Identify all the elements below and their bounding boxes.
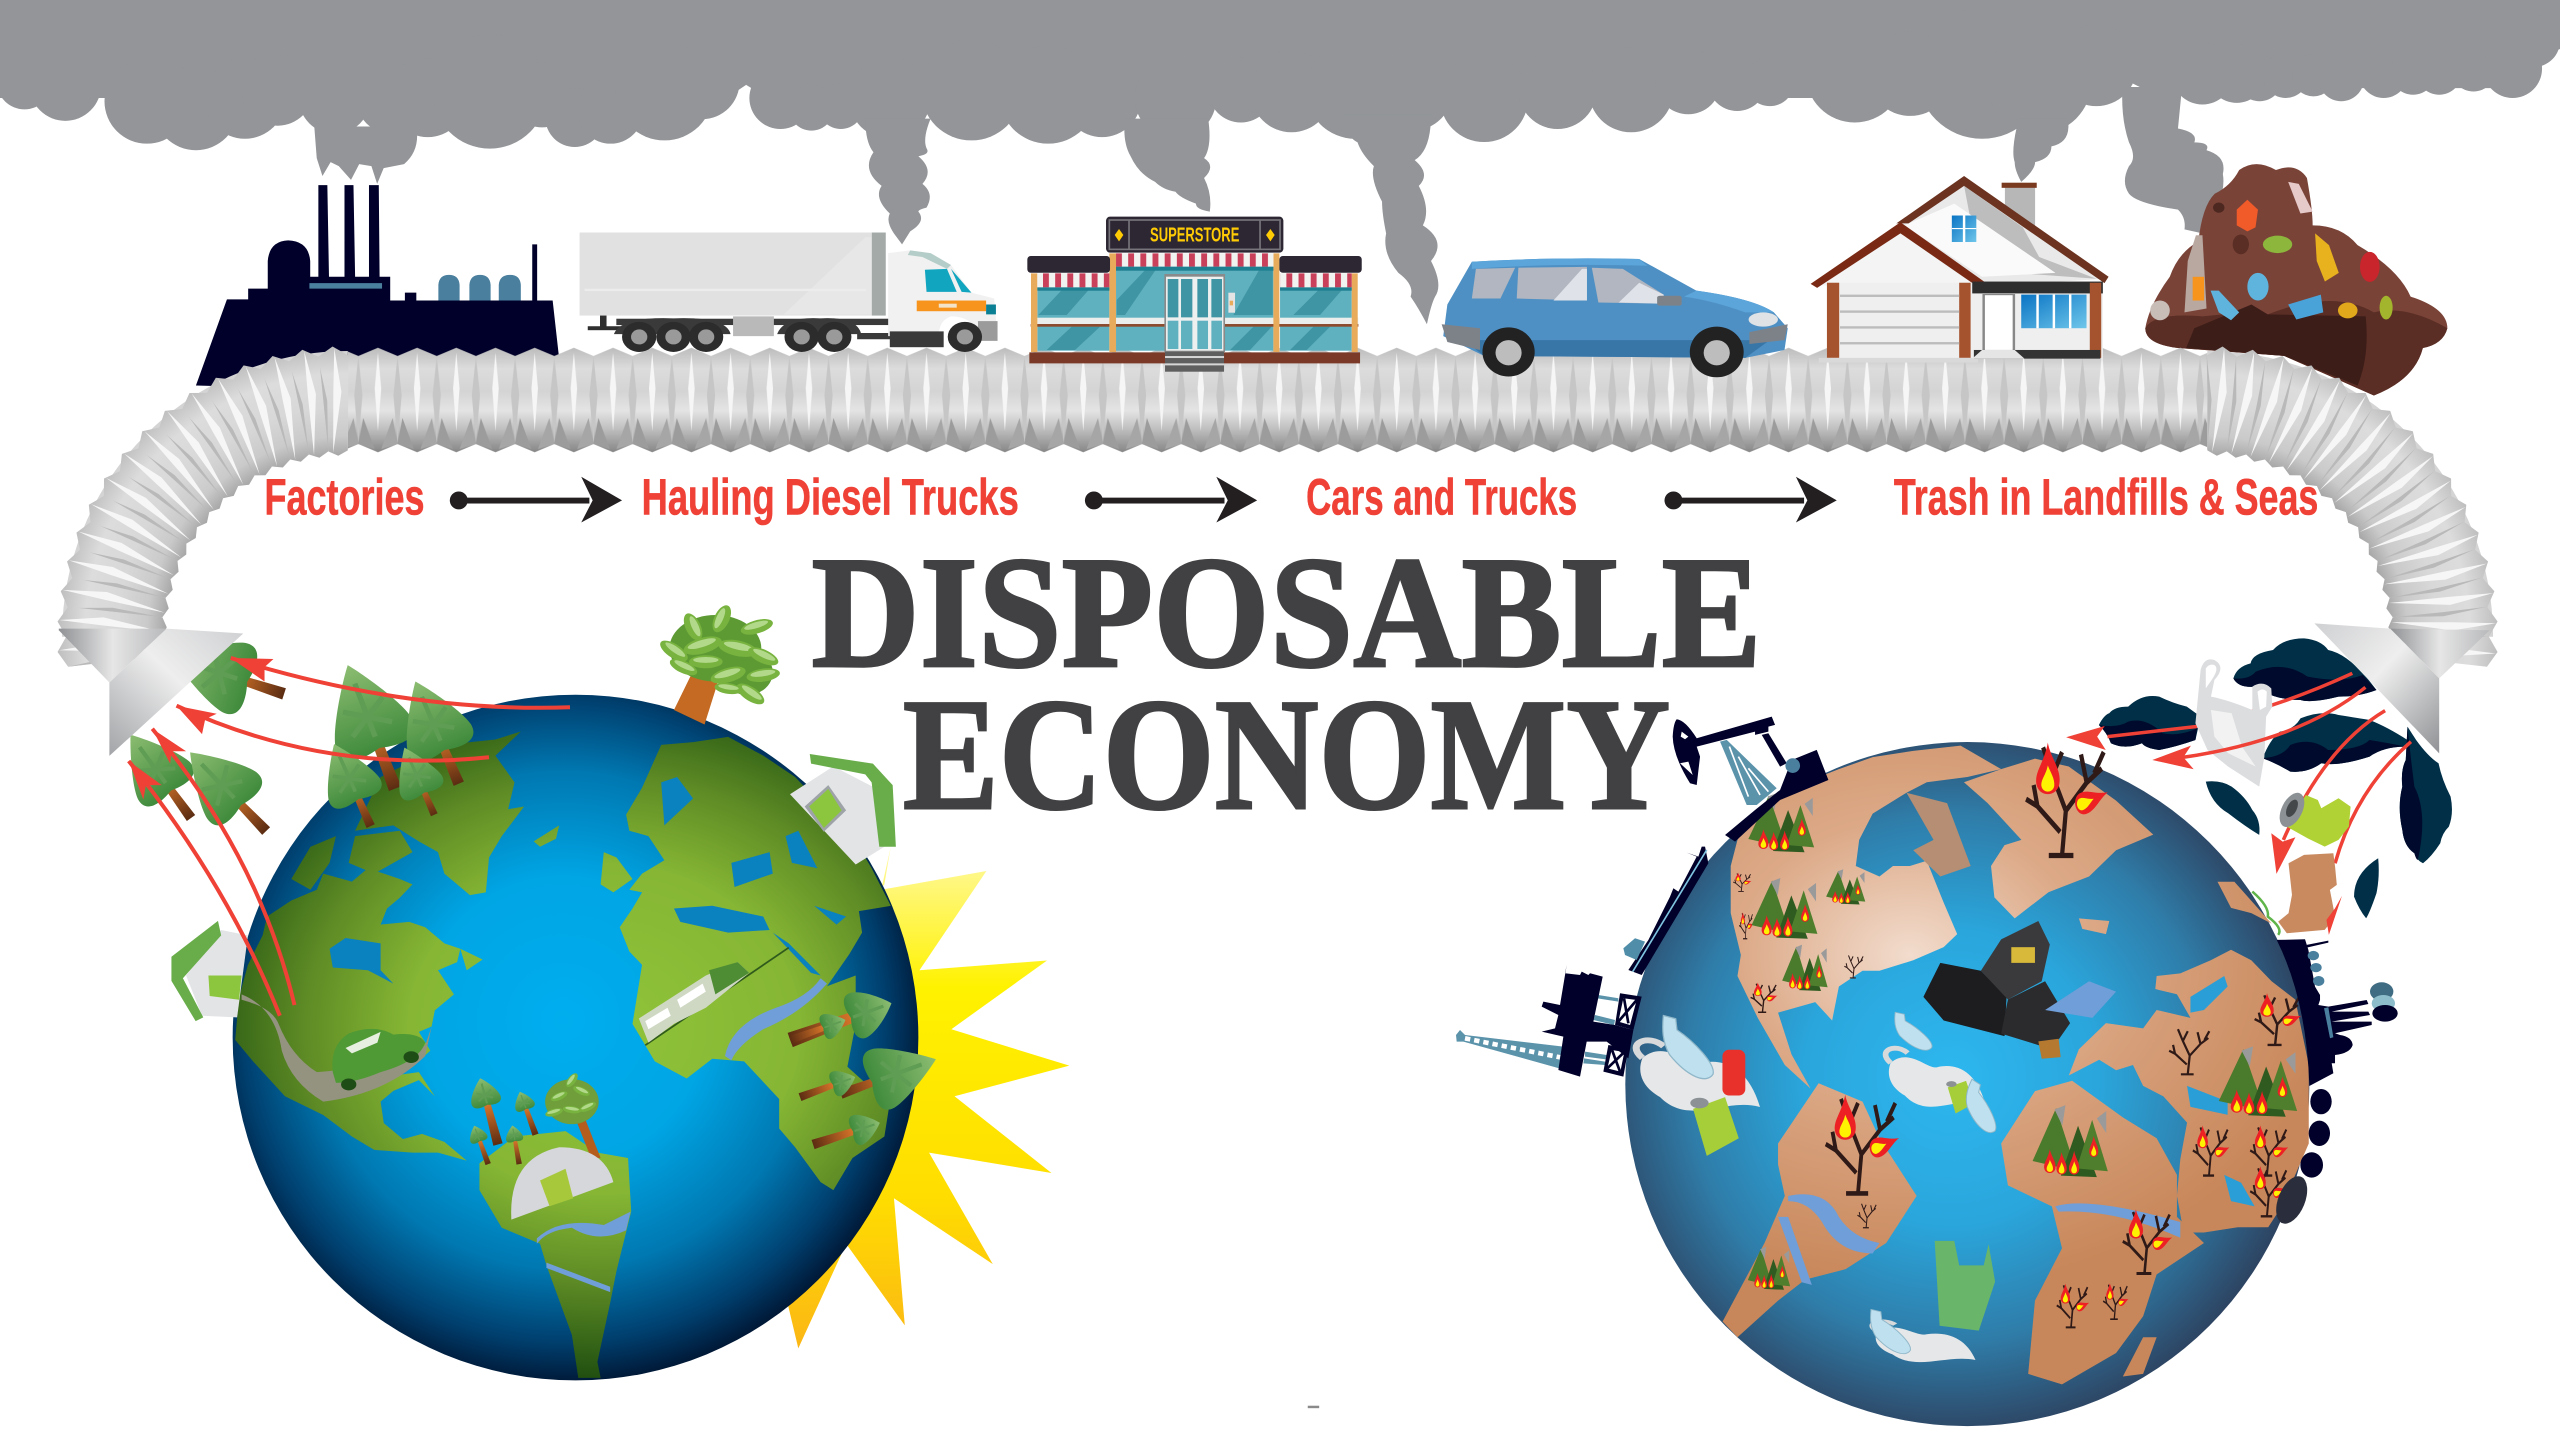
smoke plume: house bbox=[2013, 119, 2068, 182]
sun bbox=[738, 847, 1069, 1348]
house on globe: left bbox=[171, 921, 248, 1021]
flow arrows: right lower bbox=[2152, 687, 2411, 874]
left globe: healthy earth bbox=[105, 603, 947, 1380]
smoke plume: car bbox=[1345, 115, 1438, 324]
leafy tree: south america bbox=[544, 1072, 601, 1158]
store sign: SUPERSTORE bbox=[1150, 225, 1239, 247]
smoke plume: factory bbox=[314, 127, 417, 184]
fire trees bbox=[1733, 743, 2303, 1327]
right globe: polluted earth bbox=[1456, 687, 2411, 1426]
ocean trash: north atlantic bbox=[1886, 1012, 2009, 1134]
smoke plume: trash pile bbox=[2122, 87, 2224, 233]
arrow: cars to trash bbox=[1664, 477, 1837, 522]
leafy tree: top of globe bbox=[656, 603, 782, 724]
pipe bend: right bbox=[2202, 346, 2498, 667]
truck wheels bbox=[622, 322, 982, 352]
superstore bbox=[1027, 217, 1362, 372]
title line 1: DISPOSABLE bbox=[811, 523, 1762, 701]
flying trash: cardboard bbox=[2278, 853, 2342, 935]
trash pile bbox=[2145, 164, 2447, 395]
oil pump bbox=[1673, 717, 1828, 842]
cloud: right bbox=[2400, 727, 2452, 863]
store base bbox=[1029, 352, 1360, 372]
flow arrows: left bbox=[129, 658, 570, 1016]
labels row bbox=[264, 468, 2318, 525]
trees: right and south bbox=[466, 981, 947, 1167]
road and car bbox=[242, 994, 432, 1102]
house bbox=[1811, 176, 2109, 363]
burning pine forests bbox=[1748, 793, 2297, 1290]
truck bbox=[580, 233, 998, 352]
store windows bbox=[1037, 267, 1352, 351]
label: hauling diesel trucks: Hauling Diesel Trucks bbox=[642, 468, 1019, 525]
trash items bbox=[2150, 182, 2393, 320]
rig frames bbox=[1603, 993, 1642, 1077]
arrow: factories to trucks bbox=[450, 477, 622, 522]
continents bbox=[1723, 746, 2309, 1384]
ocean trash: south atlantic bbox=[1871, 1241, 1995, 1362]
store columns bbox=[1031, 253, 1358, 352]
factory tanks bbox=[309, 275, 521, 301]
ocean trash: garbage bags bbox=[1923, 921, 2116, 1059]
flying trash: can bbox=[2275, 789, 2351, 847]
label: trash: Trash in Landfills & Seas bbox=[1894, 468, 2318, 525]
store awnings bbox=[1037, 253, 1352, 291]
green cable near cardboard bbox=[2252, 892, 2279, 935]
refinery on globe right bbox=[2277, 939, 2398, 1086]
inland seas bbox=[2187, 976, 2255, 1206]
smoke plume: truck bbox=[865, 119, 931, 244]
store band bbox=[1031, 318, 1358, 327]
funnel arrow: left bbox=[59, 629, 243, 756]
flow arrow: right upper bbox=[2066, 673, 2352, 750]
refinery smoke bbox=[2370, 982, 2398, 1022]
coal and stones on globe right bbox=[2270, 1089, 2332, 1228]
offshore rig bbox=[1456, 965, 1642, 1077]
seas bbox=[330, 777, 846, 984]
train bbox=[639, 948, 789, 1045]
flying trash: plastic bag bbox=[2195, 659, 2272, 787]
oil tanker bbox=[1623, 847, 1708, 975]
store door bbox=[1164, 274, 1225, 352]
factory silhouette bbox=[196, 185, 563, 395]
cloud: left bbox=[2099, 696, 2201, 750]
cloud: small right bbox=[2354, 858, 2379, 918]
rivers bbox=[537, 978, 827, 1292]
trees: above globe bbox=[105, 623, 491, 855]
cloud: middle bbox=[2263, 713, 2407, 772]
rig platform bbox=[1542, 965, 1633, 1077]
tiny mark near bottom bbox=[1308, 1406, 1319, 1408]
rig crane bbox=[1456, 1030, 1563, 1068]
label: cars and trucks: Cars and Trucks bbox=[1306, 468, 1577, 525]
corrugated pipe bbox=[57, 346, 2498, 667]
cloud: upper bbox=[2233, 638, 2376, 701]
store door panel bbox=[1228, 293, 1235, 313]
dried rivers bbox=[1778, 1194, 2180, 1285]
store roofs bbox=[1027, 256, 1362, 273]
funnel arrow: right bbox=[2314, 623, 2490, 753]
continents bbox=[235, 731, 891, 1378]
title line 2: ECONOMY bbox=[903, 665, 1670, 843]
title bbox=[811, 523, 1762, 843]
arrow: trucks to cars bbox=[1085, 477, 1257, 522]
car bbox=[1442, 258, 1788, 377]
store sign bbox=[1106, 217, 1283, 253]
smoke plume: superstore bbox=[1124, 119, 1210, 212]
pipe bend: left bbox=[57, 346, 354, 667]
smoke cloud ceiling bbox=[0, 0, 2560, 324]
dark smoke clouds bbox=[2099, 638, 2452, 918]
house on globe: top right bbox=[790, 754, 896, 864]
cloud: small bbox=[2206, 781, 2260, 835]
dome house: south america bbox=[511, 1147, 613, 1220]
rig struts bbox=[1583, 995, 1618, 1065]
car wheels bbox=[1482, 327, 1744, 377]
ocean trash: pacific bbox=[1636, 1016, 1760, 1156]
label: factories: Factories bbox=[264, 468, 424, 525]
